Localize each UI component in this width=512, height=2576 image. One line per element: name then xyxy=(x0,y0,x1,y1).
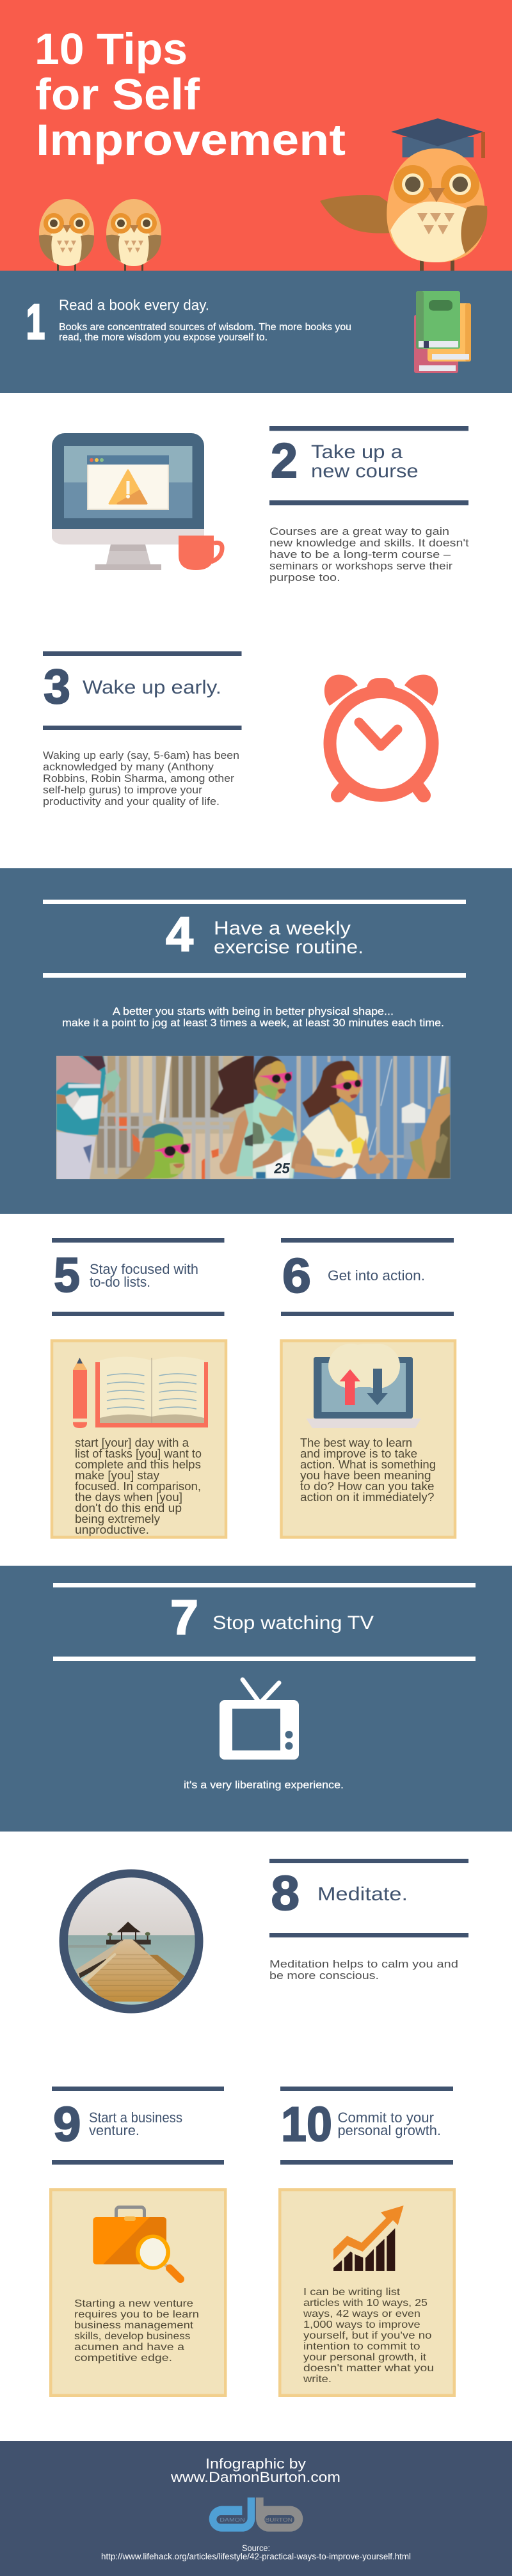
text block: tip 3 xyxy=(43,749,239,807)
text block: tip 8: Meditation helps to calm you and xyxy=(269,1958,458,1970)
text block: tip 3: Robbins, Robin Sharma, among other xyxy=(43,772,234,784)
rule xyxy=(53,1657,476,1661)
title: for Self xyxy=(35,70,200,119)
text block: tip 10: ways, 42 ways or even xyxy=(303,2309,420,2319)
text block: tip 10: intention to commit to xyxy=(303,2341,420,2352)
text block: tip 7: it's a very liberating experience. xyxy=(184,1779,344,1791)
icon: small owl right xyxy=(106,199,161,271)
heading: tip 10: personal growth. xyxy=(338,2122,441,2138)
title: 10 Tips xyxy=(35,24,188,74)
card: tip 10 xyxy=(280,2190,454,2396)
text block: tip 5: unproductive. xyxy=(75,1523,149,1536)
rule xyxy=(52,1238,224,1243)
text block: tip 9: competitive edge. xyxy=(74,2353,172,2364)
text block: tip 9: Starting a new venture xyxy=(74,2298,193,2309)
icon: alarm clock xyxy=(324,675,438,795)
icon: small owl left xyxy=(39,199,94,271)
rule xyxy=(280,2087,453,2091)
number 2: 2 xyxy=(271,434,298,488)
text block: tip 6: to do? How can you take xyxy=(300,1480,434,1493)
text block: tip 10: your personal growth, it xyxy=(303,2352,427,2363)
text block: tip 5: start [your] day with a xyxy=(75,1436,189,1449)
panel: tip 9 xyxy=(51,2087,225,2396)
text block: tip 10: doesn't matter what you xyxy=(303,2363,434,2374)
text block: tip 9: business management xyxy=(74,2320,194,2331)
rule xyxy=(280,2160,453,2165)
text block: tip 2: Courses are a great way to gain xyxy=(269,525,449,537)
heading: tip 3: Wake up early. xyxy=(83,677,221,698)
panel: tip 7 xyxy=(0,1566,512,1831)
text block: tip 10: 1,000 ways to improve xyxy=(303,2319,420,2330)
credit text xyxy=(170,2456,340,2485)
text block: tip 4 xyxy=(62,1005,444,1029)
panel: tip 5 xyxy=(52,1238,226,1537)
rule xyxy=(269,426,468,431)
text block: tip 9 xyxy=(74,2298,199,2364)
title: Improvement xyxy=(36,115,346,164)
text block: tip 4: make it a point to jog at least 3 times a week, at least 30 minutes each time. xyxy=(62,1017,444,1029)
source: Source: xyxy=(242,2543,270,2553)
text block: tip 4: A better you starts with being in better physical shape... xyxy=(113,1005,394,1017)
text block: tip 5: don't do this end up xyxy=(75,1502,182,1515)
heading: tip 5: to-do lists. xyxy=(90,1274,150,1290)
number 3: 3 xyxy=(44,660,70,714)
number 4: 4 xyxy=(166,907,193,962)
heading: tip 5 xyxy=(90,1261,198,1290)
text block: tip 6: action on it immediately? xyxy=(300,1491,434,1504)
panel: tip 6 xyxy=(281,1238,455,1537)
text block: tip 6: action. What is something xyxy=(300,1458,436,1471)
text block: tip 2: purpose too. xyxy=(269,571,340,584)
text block: tip 3: Waking up early (say, 5-6am) has been xyxy=(43,749,239,761)
heading: tip 1: Read a book every day. xyxy=(59,297,209,314)
text block: tip 5: focused. In comparison, xyxy=(75,1480,201,1493)
text block: tip 6: you have been meaning xyxy=(300,1469,431,1482)
icon: television xyxy=(220,1680,299,1760)
panel: tip 1 xyxy=(0,271,512,393)
text block: tip 8: be more conscious. xyxy=(269,1969,379,1982)
heading: tip 4: exercise routine. xyxy=(214,937,364,958)
number 7: 7 xyxy=(170,1591,198,1645)
text block: tip 3: self-help gurus) to improve your xyxy=(43,784,202,796)
logo: Damon Burton: BURTON xyxy=(265,2516,292,2523)
number 8: 8 xyxy=(271,1866,300,1921)
panel: footer xyxy=(0,2441,512,2576)
number 1: 1 xyxy=(26,295,45,349)
rule xyxy=(43,973,466,978)
heading: tip 2: new course xyxy=(311,461,419,482)
text block: tip 2 xyxy=(269,525,469,584)
rule xyxy=(281,1238,454,1243)
text block: tip 9: requires you to be learn xyxy=(74,2309,199,2320)
rule xyxy=(43,900,466,904)
text block: tip 1: Books are concentrated sources of wisdom. The more books you xyxy=(59,322,351,333)
card: tip 6 xyxy=(282,1341,455,1537)
text block: tip 10: yourself, but if you've no xyxy=(303,2330,432,2341)
text block: tip 5: make [you] stay xyxy=(75,1469,159,1482)
rule xyxy=(269,1933,468,1937)
text block: tip 2: new knowledge and skills. It doesn't xyxy=(269,537,469,549)
number 5: 5 xyxy=(54,1248,80,1303)
rule xyxy=(53,1583,476,1587)
text block: tip 10: write. xyxy=(303,2374,332,2385)
text block: tip 3: productivity and your quality of life. xyxy=(43,795,220,807)
rule xyxy=(52,2087,224,2091)
credit text: Infographic by xyxy=(205,2456,306,2472)
text block: tip 2: have to be a long-term course – xyxy=(269,548,451,561)
icon: graduate owl xyxy=(320,118,487,271)
heading: tip 2: Take up a xyxy=(311,441,403,463)
heading: tip 6: Get into action. xyxy=(328,1268,425,1284)
photo: runners covered in colour powder xyxy=(56,1056,451,1179)
rule xyxy=(52,2160,224,2165)
text block: tip 10 xyxy=(303,2287,434,2385)
text block: tip 5: being extremely xyxy=(75,1513,160,1525)
icon: pencil and open book xyxy=(73,1356,208,1428)
text block: tip 5: list of tasks [you] want to xyxy=(75,1447,202,1460)
number 10: 10 xyxy=(281,2097,332,2152)
panel: header xyxy=(0,0,512,271)
text block: tip 10: I can be writing list xyxy=(303,2287,401,2298)
rule xyxy=(43,651,242,656)
text block: tip 8 xyxy=(269,1958,458,1982)
source xyxy=(101,2543,411,2561)
heading: tip 9: venture. xyxy=(89,2122,140,2138)
icon: briefcase and magnifier xyxy=(93,2207,180,2279)
rule xyxy=(269,500,468,505)
icon: rising chart xyxy=(333,2206,404,2271)
title xyxy=(35,24,346,164)
icon: computer with warning and mug xyxy=(52,433,222,570)
text block: tip 3: acknowledged by many (Anthony xyxy=(43,761,214,773)
rule xyxy=(52,1312,224,1316)
card: tip 9 xyxy=(51,2190,225,2396)
heading: tip 2 xyxy=(311,441,419,482)
heading: tip 10 xyxy=(338,2110,441,2138)
text block: tip 2: seminars or workshops serve their xyxy=(269,560,452,572)
heading: tip 7: Stop watching TV xyxy=(212,1612,374,1634)
photo: pier in circular frame xyxy=(59,1870,204,2013)
heading: tip 10: Commit to your xyxy=(338,2110,434,2126)
text block: tip 5: complete and this helps xyxy=(75,1458,201,1471)
heading: tip 8: Meditate. xyxy=(317,1884,408,1905)
text block: tip 6: The best way to learn xyxy=(300,1436,412,1449)
bib number 25: 25 xyxy=(273,1160,291,1176)
text block: tip 5 xyxy=(75,1436,202,1536)
text block: tip 9: acumen and have a xyxy=(74,2342,184,2353)
icon: stack of books xyxy=(414,291,471,373)
panel: tip 3 xyxy=(43,651,438,807)
rule xyxy=(281,1312,454,1316)
icon: laptop with cloud and arrows xyxy=(306,1344,421,1428)
text block: tip 6: and improve is to take xyxy=(300,1447,417,1460)
text block: tip 1: read, the more wisdom you expose yourself to. xyxy=(59,332,268,343)
logo: Damon Burton xyxy=(209,2497,303,2532)
logo: Damon Burton: DAMON xyxy=(220,2516,245,2523)
text block: tip 10: articles with 10 ways, 25 xyxy=(303,2298,428,2309)
heading: tip 5: Stay focused with xyxy=(90,1261,198,1277)
text block: tip 6 xyxy=(300,1436,436,1504)
panel: tip 2 xyxy=(52,426,469,584)
credit text: www.DamonBurton.com xyxy=(170,2469,340,2485)
text block: tip 1 xyxy=(59,322,351,343)
heading: tip 4: Have a weekly xyxy=(214,918,351,939)
rule xyxy=(43,726,242,730)
panel: tip 8 xyxy=(59,1859,468,2013)
text block: tip 5: the days when [you] xyxy=(75,1491,182,1504)
panel: tip 10 xyxy=(280,2087,454,2396)
number 6: 6 xyxy=(282,1249,311,1303)
number 9: 9 xyxy=(53,2097,81,2152)
heading: tip 9 xyxy=(89,2110,182,2138)
source: http://www.lifehack.org/articles/lifestyle/42-practical-ways-to-improve-yourself.html xyxy=(101,2552,411,2561)
heading: tip 4 xyxy=(214,918,364,958)
card: tip 5 xyxy=(52,1341,226,1537)
panel: tip 4 xyxy=(0,868,512,1214)
rule xyxy=(269,1859,468,1863)
heading: tip 9: Start a business xyxy=(89,2110,182,2126)
text block: tip 9: skills, develop business xyxy=(74,2331,191,2342)
